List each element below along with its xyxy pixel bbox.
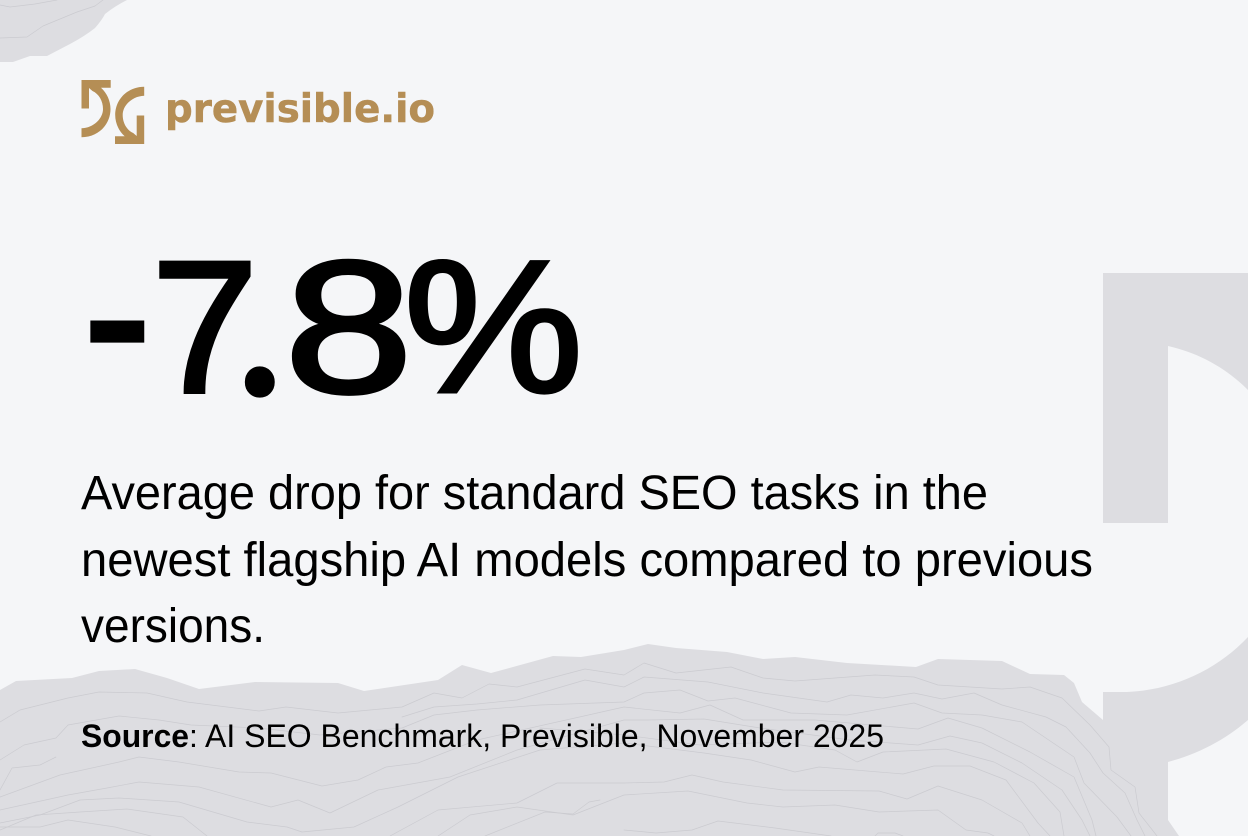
source line: Source — [81, 718, 189, 754]
torn paper texture: top-left corner — [0, 0, 127, 62]
big statistic: . — [232, 158, 288, 452]
big statistic: - — [84, 191, 151, 438]
icon: logo mark — [82, 80, 144, 144]
description text — [81, 467, 1093, 653]
big statistic: % — [404, 223, 583, 432]
logo wordmark: previsible.io — [165, 87, 435, 132]
description text: versions. — [81, 600, 265, 653]
description text: Average drop for standard SEO tasks in the — [81, 467, 988, 520]
big statistic: 7 — [152, 223, 258, 433]
big statistic — [84, 158, 583, 452]
torn paper texture: bottom band with contour lines — [0, 644, 1179, 836]
logo: previsible.io — [82, 80, 435, 144]
background watermark: large logo mark — [1103, 273, 1248, 836]
source line: : AI SEO Benchmark, Previsible, November 2025 — [189, 718, 884, 754]
big statistic: 8 — [284, 222, 413, 432]
description text: newest flagship AI models compared to previous — [81, 534, 1093, 587]
